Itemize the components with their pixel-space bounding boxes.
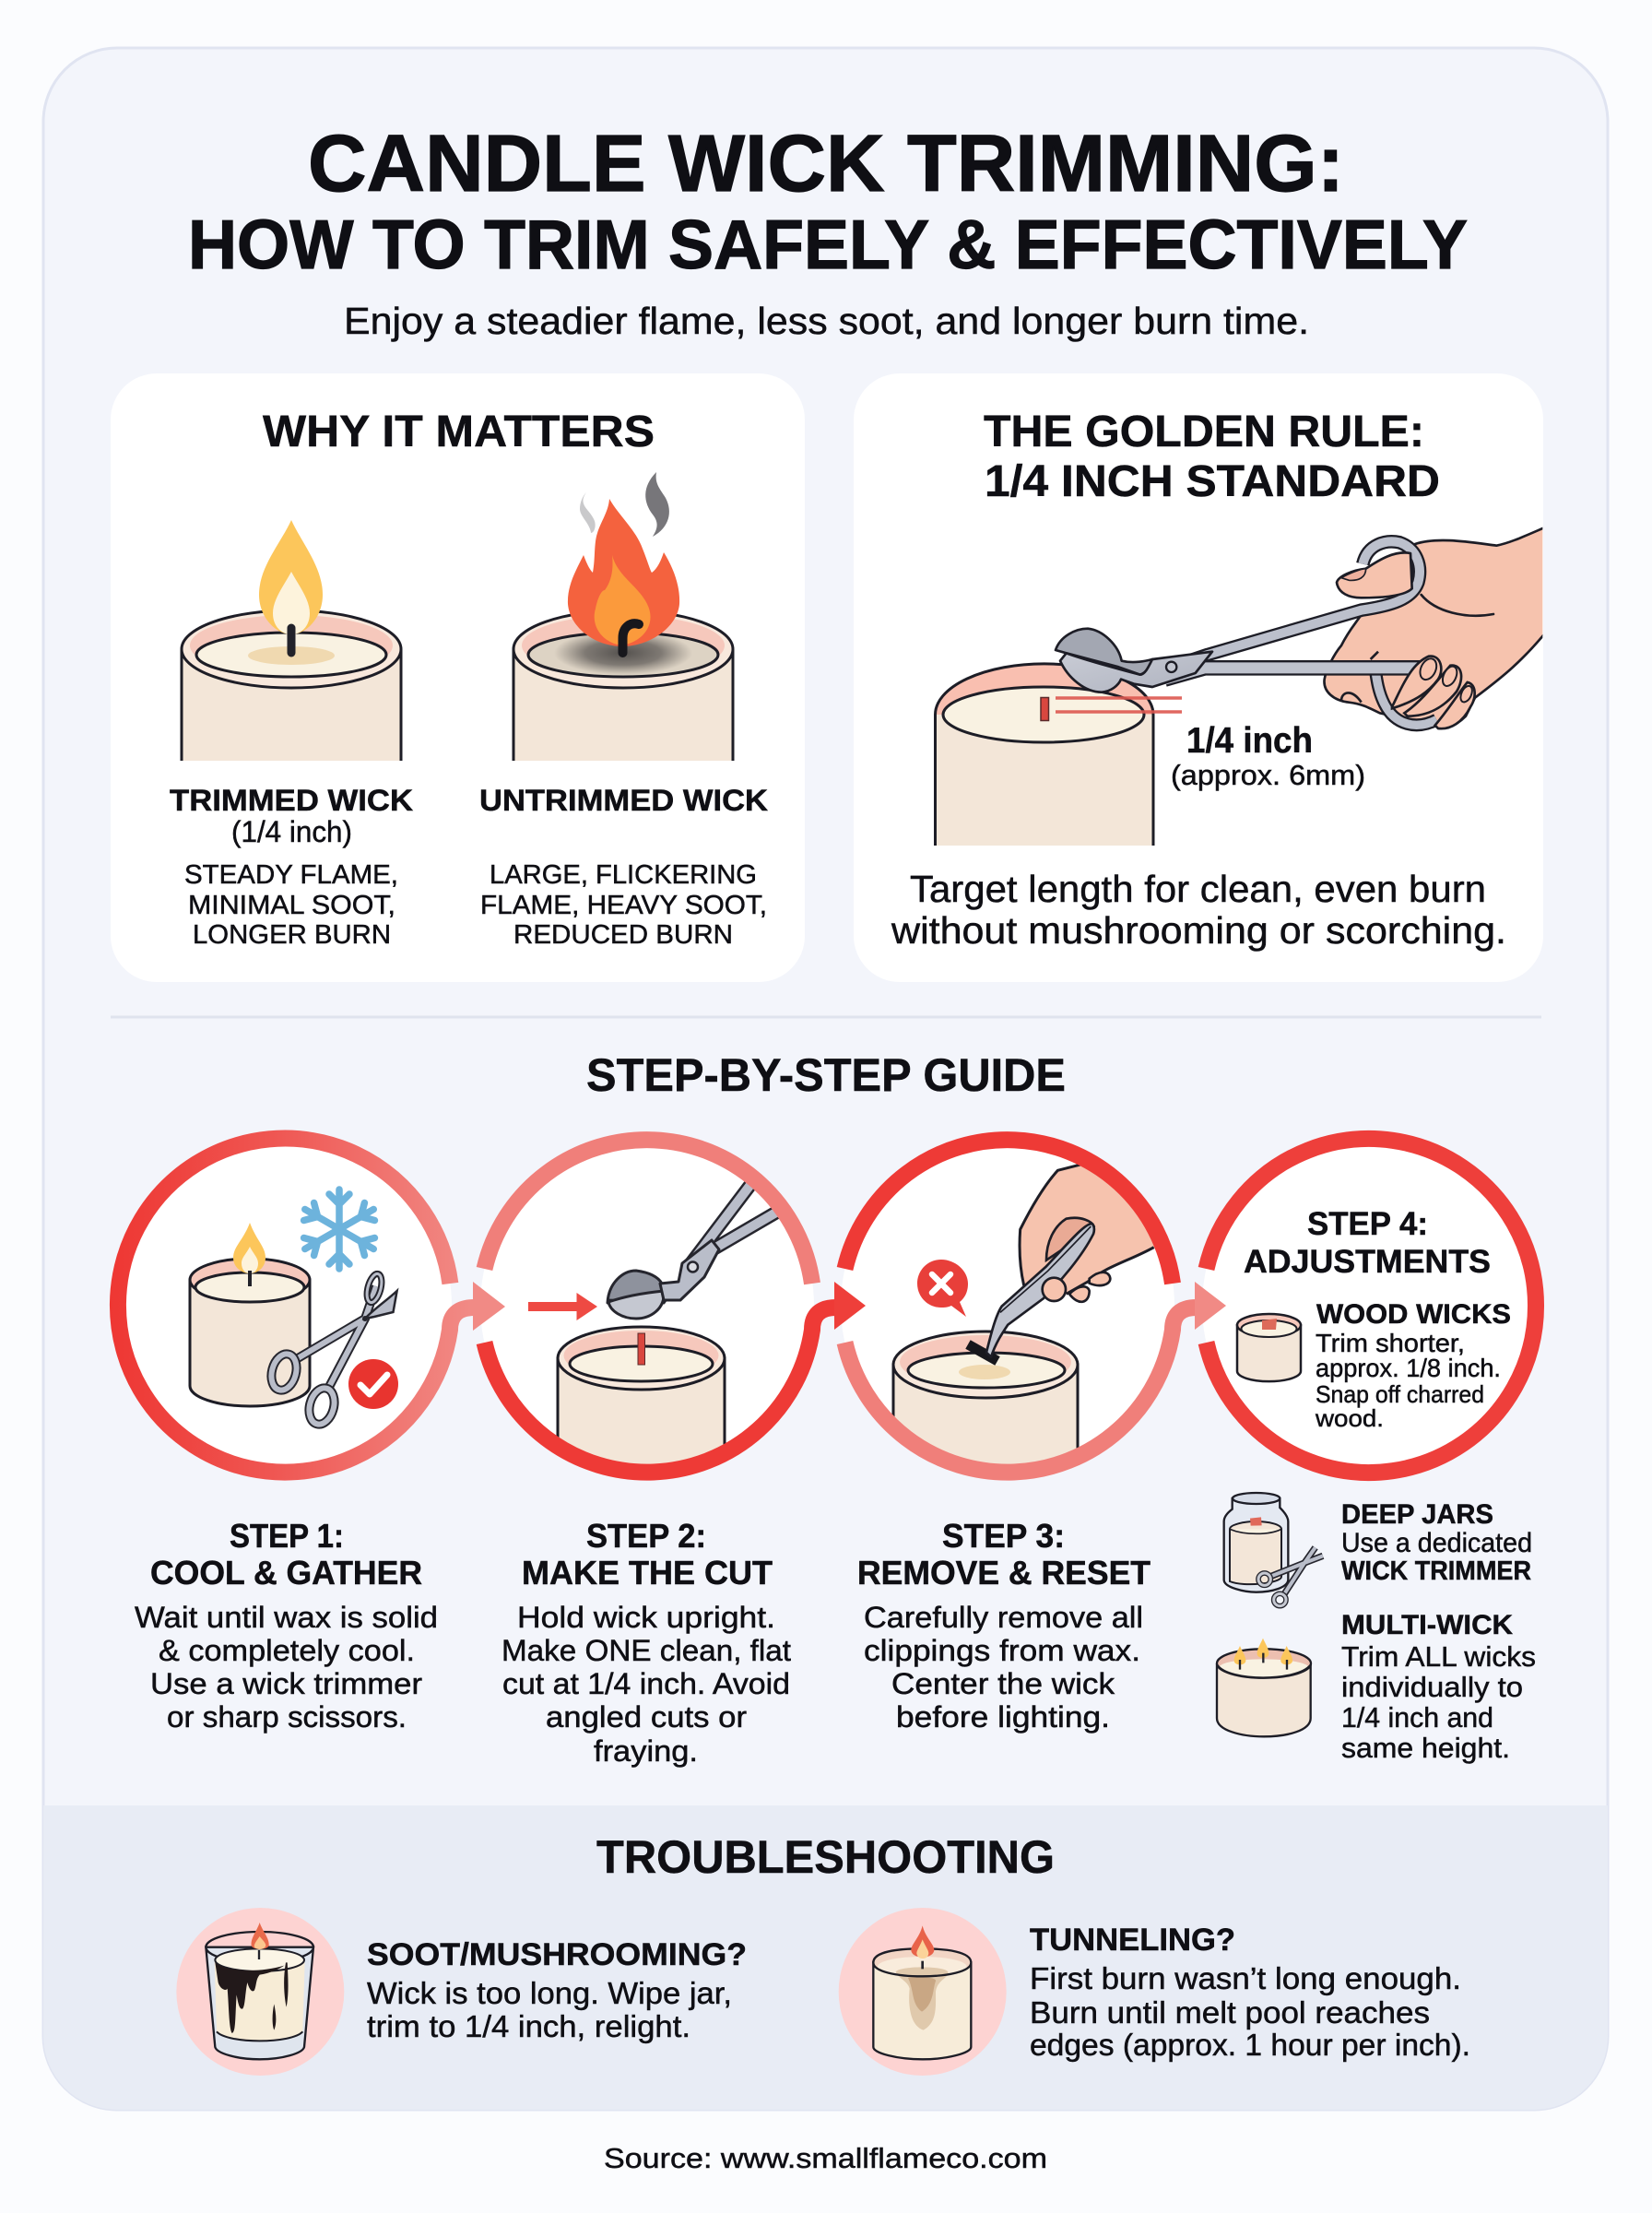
step 4 heading: STEP 4:	[1307, 1206, 1428, 1242]
title line 2: HOW TO TRIM SAFELY & EFFECTIVELY	[188, 206, 1468, 283]
caption: trimmed wick: (1/4 inch)	[231, 815, 352, 848]
golden rule description: Target length for clean, even burn	[910, 868, 1486, 910]
icon: candle being cleaned	[893, 1331, 1078, 1475]
golden rule description: without mushrooming or scorching.	[891, 909, 1506, 952]
step 3 caption: Center the wick	[891, 1667, 1115, 1700]
text: multi-wick	[1341, 1610, 1536, 1764]
step 2 caption	[502, 1517, 791, 1768]
text: multi-wick: 1/4 inch and	[1341, 1701, 1493, 1734]
icon: sooty jar	[176, 1908, 344, 2076]
icon: candle with measured wick	[935, 664, 1153, 846]
step 1 caption: Use a wick trimmer	[150, 1667, 422, 1700]
caption: untrimmed wick: LARGE, FLICKERING	[490, 860, 757, 890]
icon: scissors	[267, 1272, 397, 1427]
icon: untrimmed candle	[513, 472, 733, 761]
panel: golden rule	[854, 373, 1555, 982]
text: wood wicks: approx. 1/8 inch.	[1316, 1354, 1501, 1382]
text: wood wicks: WOOD WICKS	[1316, 1299, 1511, 1330]
step 4 heading	[1244, 1206, 1491, 1280]
text: wood wicks: Trim shorter,	[1316, 1329, 1465, 1357]
text: soot/mushrooming	[367, 1937, 747, 2043]
caption: untrimmed wick	[479, 784, 768, 950]
icon: deep jar	[1224, 1493, 1323, 1606]
icon: red arrow to trimmer	[528, 1293, 597, 1320]
text: tunneling: First burn wasn’t long enough.	[1030, 1961, 1461, 1995]
caption: trimmed wick: MINIMAL SOOT,	[188, 891, 395, 920]
step 3 caption: STEP 3:	[942, 1517, 1065, 1555]
step 1 circle	[118, 1139, 475, 1473]
text: wood wicks	[1315, 1299, 1511, 1432]
icon: candle before cut	[558, 1327, 725, 1475]
caption: trimmed wick: STEADY FLAME,	[184, 860, 398, 890]
icon: wick trimmer	[608, 1178, 785, 1319]
step 1 caption: & completely cool.	[159, 1634, 415, 1667]
step 2 circle	[480, 1139, 836, 1475]
caption: trimmed wick: LONGER BURN	[193, 920, 391, 950]
heading: golden rule	[984, 408, 1440, 506]
step 2 caption: Make ONE clean, flat	[502, 1634, 791, 1667]
measurement lines	[1056, 698, 1182, 712]
text: tunneling: Burn until melt pool reaches	[1030, 1995, 1430, 2030]
heading: golden rule: THE GOLDEN RULE:	[984, 408, 1424, 456]
panel: troubleshooting	[43, 1805, 1608, 2110]
text: wood wicks: Snap off charred	[1316, 1380, 1484, 1408]
step 1 caption: Wait until wax is solid	[135, 1601, 438, 1634]
caption: trimmed wick	[170, 784, 413, 950]
text: deep jars: DEEP JARS	[1341, 1499, 1493, 1530]
icon: tunneling candle	[839, 1908, 1007, 2076]
step 2 caption: MAKE THE CUT	[522, 1554, 773, 1592]
arrow: step 3 to 4	[1195, 1282, 1226, 1330]
icon: snowflake	[300, 1189, 379, 1269]
text: multi-wick: same height.	[1341, 1732, 1510, 1764]
icon: trimmed candle	[182, 520, 401, 761]
measurement label: (approx. 6mm)	[1171, 759, 1365, 791]
icon: x speech bubble	[917, 1260, 968, 1317]
text: tunneling: edges (approx. 1 hour per inch).	[1030, 2028, 1470, 2062]
icon: hand holding wick trimmer	[1056, 523, 1555, 728]
step 1 ring	[118, 1139, 475, 1473]
text: tunneling	[1030, 1923, 1470, 2062]
text: deep jars: WICK TRIMMER	[1341, 1556, 1531, 1586]
step 2 caption: cut at 1/4 inch. Avoid	[502, 1667, 790, 1700]
icon: check badge	[348, 1359, 398, 1409]
step 3 caption: Carefully remove all	[864, 1601, 1143, 1634]
panel: why it matters	[111, 373, 805, 982]
text: multi-wick: MULTI-WICK	[1341, 1610, 1513, 1640]
step 2 caption: Hold wick upright.	[517, 1601, 775, 1634]
icon: cooled candle	[190, 1223, 310, 1406]
text: multi-wick: individually to	[1341, 1671, 1523, 1703]
step 4 ring	[1206, 1139, 1536, 1473]
text: deep jars	[1341, 1499, 1532, 1586]
step 3 caption: clippings from wax.	[864, 1634, 1140, 1667]
subtitle: Enjoy a steadier flame, less soot, and longer burn time.	[344, 300, 1309, 342]
measurement label: 1/4 inch	[1186, 721, 1313, 761]
heading: why it matters: WHY IT MATTERS	[263, 408, 655, 456]
step 1 caption: STEP 1:	[230, 1517, 344, 1555]
heading: golden rule: 1/4 INCH STANDARD	[985, 457, 1440, 506]
source line: Source: www.smallflameco.com	[604, 2142, 1047, 2174]
step 1 caption	[135, 1517, 438, 1734]
step 3 caption: before lighting.	[896, 1700, 1110, 1734]
step 2 caption: angled cuts or	[546, 1700, 747, 1734]
measurement label	[1171, 721, 1365, 791]
heading: troubleshooting: TROUBLESHOOTING	[596, 1831, 1055, 1883]
text: soot/mushrooming: Wick is too long. Wipe jar,	[367, 1976, 732, 2010]
golden rule description	[891, 868, 1506, 952]
text: wood wicks: wood.	[1315, 1404, 1384, 1432]
text: soot/mushrooming: trim to 1/4 inch, relight.	[367, 2009, 690, 2043]
caption: untrimmed wick: UNTRIMMED WICK	[479, 784, 768, 817]
step 2 caption: fraying.	[594, 1734, 698, 1768]
step 1 caption: or sharp scissors.	[167, 1700, 407, 1734]
arrow: step 2 to 3	[834, 1282, 866, 1330]
caption: trimmed wick: TRIMMED WICK	[170, 784, 413, 817]
text: multi-wick: Trim ALL wicks	[1341, 1640, 1536, 1673]
heading: step-by-step guide: STEP-BY-STEP GUIDE	[586, 1049, 1066, 1101]
icon: wood wick candle	[1237, 1314, 1301, 1381]
arrow: step 1 to 2	[473, 1282, 505, 1331]
step 3 circle	[841, 1139, 1197, 1475]
step 4 heading: ADJUSTMENTS	[1244, 1244, 1491, 1280]
step 2 caption: STEP 2:	[586, 1517, 706, 1555]
step 2 ring	[485, 1140, 836, 1473]
step 1 caption: COOL & GATHER	[150, 1554, 422, 1592]
caption: untrimmed wick: REDUCED BURN	[513, 920, 733, 950]
step 3 caption: REMOVE & RESET	[857, 1554, 1150, 1592]
title line 1: CANDLE WICK TRIMMING:	[308, 119, 1344, 208]
caption: untrimmed wick: FLAME, HEAVY SOOT,	[480, 891, 767, 920]
icon: multi-wick candle	[1217, 1639, 1311, 1736]
step 4 circle	[1202, 1139, 1536, 1473]
text: tunneling: TUNNELING?	[1030, 1923, 1235, 1958]
step 3 ring	[844, 1140, 1197, 1473]
title block	[188, 119, 1468, 342]
text: soot/mushrooming: SOOT/MUSHROOMING?	[367, 1937, 747, 1972]
step 3 caption	[857, 1517, 1150, 1734]
icon: hand with tweezers	[985, 1164, 1154, 1358]
text: deep jars: Use a dedicated	[1341, 1528, 1532, 1558]
